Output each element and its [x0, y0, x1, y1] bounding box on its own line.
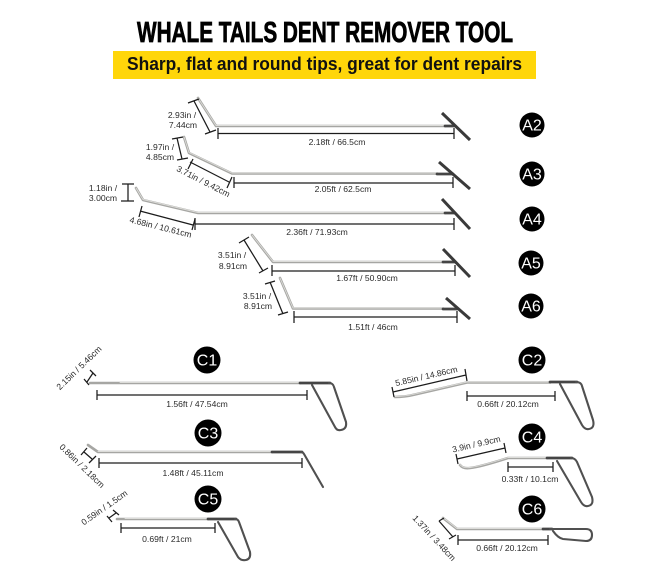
tool A2: 2.18ft / 66.5cm [309, 137, 365, 147]
title: WHALE TAILS DENT REMOVER TOOL [137, 17, 513, 49]
badge C2: C2 [522, 352, 542, 370]
tool C2: 0.66ft / 20.12cm [477, 399, 539, 409]
tool C3 [57, 442, 323, 490]
tool A6 [243, 278, 470, 332]
badge A6: A6 [521, 298, 541, 316]
tool A6: 3.51in / [243, 291, 272, 301]
badge C1: C1 [197, 352, 217, 370]
badge A3: A3 [522, 166, 542, 184]
badge A5: A5 [521, 256, 541, 272]
badge C6 [518, 496, 546, 522]
tool A2: 2.93in / [168, 110, 197, 120]
subtitle banner [113, 51, 536, 79]
tool A4: 4.68in / 10.61cm [129, 215, 193, 240]
tool A3: 1.97in / [146, 142, 175, 152]
tool C6: 0.66ft / 20.12cm [476, 543, 538, 553]
badge A2: A2 [522, 118, 542, 134]
tool A5: 1.67ft / 50.90cm [336, 273, 398, 283]
tool C4: 3.9in / 9.9cm [451, 434, 501, 454]
badge C4 [518, 424, 546, 450]
tool A3: 3.71in / 9.42cm [175, 164, 232, 199]
tool A2 [168, 98, 470, 147]
tool A4: 2.36ft / 71.93cm [286, 227, 348, 237]
tool A4 [89, 183, 470, 240]
tool A3: 4.85cm [146, 152, 174, 162]
tool C2: 5.85in / 14.86cm [394, 364, 458, 388]
badge A6 [518, 294, 544, 318]
tool A3 [146, 137, 470, 199]
tool A3: 2.05ft / 62.5cm [315, 184, 371, 194]
badge C2 [518, 346, 546, 374]
tool C5: 0.59in / 1.5cm [79, 488, 129, 527]
badge A4: A4 [522, 212, 542, 228]
tool C1: 2.15in / 5.46cm [54, 344, 104, 392]
tool C6 [410, 513, 592, 563]
badge A5 [518, 250, 544, 276]
tool C4 [451, 434, 592, 506]
badge C3 [194, 420, 222, 446]
badge A2 [520, 112, 544, 138]
tool A6: 8.91cm [244, 301, 272, 311]
tool A6: 1.51ft / 46cm [348, 322, 398, 332]
tool C6: 1.37in / 3.48cm [410, 513, 458, 563]
badge C5 [194, 486, 222, 512]
tool C3: 0.86in / 2.18cm [57, 442, 107, 490]
tool A4: 3.00cm [89, 193, 117, 203]
tool C3: 1.48ft / 45.11cm [162, 468, 224, 478]
tool A5: 3.51in / [218, 250, 247, 260]
badge C5: C5 [198, 492, 218, 508]
tool A5: 8.91cm [219, 261, 247, 271]
tool C4: 0.33ft / 10.1cm [502, 474, 558, 484]
tool C1 [54, 344, 346, 430]
tool C5 [79, 488, 250, 560]
tool C2 [392, 364, 594, 429]
subtitle banner: Sharp, flat and round tips, great for dent repairs [127, 54, 522, 74]
badge C3: C3 [198, 426, 218, 442]
badge C1 [194, 346, 220, 374]
badge A4 [520, 206, 544, 232]
badge C4: C4 [522, 430, 542, 446]
tool A4: 1.18in / [89, 183, 118, 193]
badge C6: C6 [522, 502, 542, 518]
tool A2: 7.44cm [169, 120, 197, 130]
badge A3 [520, 162, 544, 186]
tool C1: 1.56ft / 47.54cm [166, 399, 228, 409]
tool C5: 0.69ft / 21cm [142, 534, 192, 544]
tool A5 [218, 235, 470, 283]
